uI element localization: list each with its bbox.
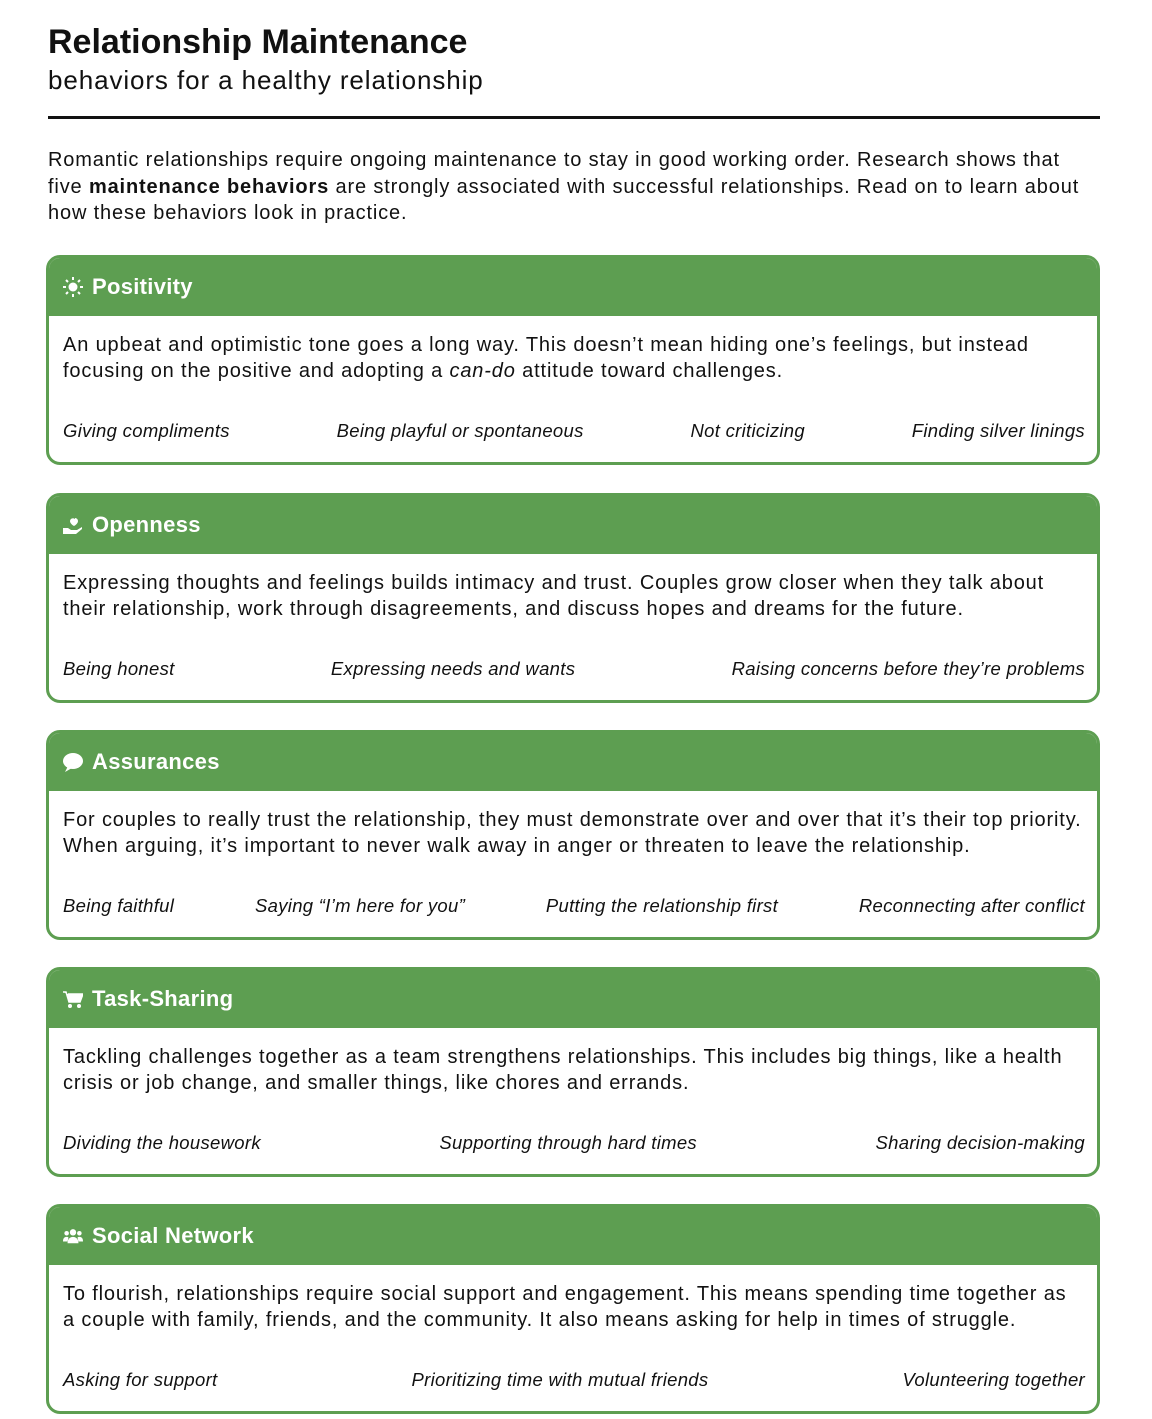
- body text: their relationship, work through disagreements, and discuss hopes and dreams for the future.: [63, 598, 964, 620]
- header: task-sharing: [49, 970, 1097, 1028]
- examples: Prioritizing time with mutual friends: [412, 1369, 708, 1390]
- body text: focusing on the positive and adopting a can-do attitude toward challenges.: [63, 360, 783, 382]
- body text: crisis or job change, and smaller things, like chores and errands.: [63, 1072, 689, 1094]
- examples: Dividing the housework: [63, 1132, 261, 1153]
- examples: Finding silver linings: [912, 420, 1085, 441]
- panel: task-sharing: [46, 967, 1100, 1177]
- examples: Saying “I’m here for you”: [255, 895, 465, 916]
- header: positivity: [49, 258, 1097, 316]
- body text: [63, 334, 1029, 382]
- examples: Raising concerns before they’re problems: [732, 658, 1085, 679]
- title: Relationship Maintenance: [48, 23, 467, 61]
- panel: positivity: [46, 255, 1100, 465]
- examples: Expressing needs and wants: [331, 658, 575, 679]
- header: assurances: Assurances: [92, 749, 220, 774]
- examples: [62, 1369, 1086, 1390]
- examples: Asking for support: [63, 1369, 218, 1390]
- examples: Volunteering together: [902, 1369, 1085, 1390]
- examples: [63, 1132, 1085, 1153]
- body text: [63, 1046, 1062, 1094]
- examples: Putting the relationship first: [546, 895, 778, 916]
- body text: [63, 572, 1044, 620]
- body text: For couples to really trust the relationship, they must demonstrate over and over that it’s their top priority.: [63, 809, 1082, 831]
- header: openness: [49, 496, 1097, 554]
- header: task-sharing: Task-Sharing: [92, 986, 233, 1011]
- examples: Being playful or spontaneous: [337, 420, 584, 441]
- intro text: Romantic relationships require ongoing maintenance to stay in good working order. Research shows that: [48, 149, 1060, 171]
- header: openness: Openness: [92, 512, 201, 537]
- panel: assurances: [46, 730, 1100, 940]
- header: positivity: Positivity: [92, 274, 193, 299]
- header: social network: [49, 1207, 1097, 1265]
- header: social network: Social Network: [92, 1223, 254, 1248]
- examples: Not criticizing: [690, 420, 805, 441]
- examples: Being faithful: [63, 895, 174, 916]
- body text: [63, 1283, 1067, 1331]
- examples: Supporting through hard times: [439, 1132, 697, 1153]
- intro text: [48, 149, 1079, 224]
- header: assurances: [49, 733, 1097, 791]
- panel: social network: [46, 1204, 1100, 1414]
- examples: [63, 658, 1085, 679]
- intro text: how these behaviors look in practice.: [48, 202, 407, 224]
- intro text: five maintenance behaviors are strongly associated with successful relationships. Read on to learn about: [48, 176, 1079, 198]
- body text: An upbeat and optimistic tone goes a long way. This doesn’t mean hiding one’s feelings, but instead: [63, 334, 1029, 356]
- panel: openness: [46, 493, 1100, 703]
- body text: a couple with family, friends, and the community. It also means asking for help in times of struggle.: [63, 1309, 1016, 1331]
- examples: Reconnecting after conflict: [859, 895, 1085, 916]
- body text: Expressing thoughts and feelings builds intimacy and trust. Couples grow closer when they talk about: [63, 572, 1044, 594]
- examples: Sharing decision-making: [876, 1132, 1085, 1153]
- body text: Tackling challenges together as a team strengthens relationships. This includes big things, like a health: [63, 1046, 1062, 1068]
- examples: [63, 420, 1085, 441]
- examples: Giving compliments: [63, 420, 230, 441]
- subtitle: behaviors for a healthy relationship: [48, 65, 484, 95]
- examples: Being honest: [63, 658, 175, 679]
- examples: [63, 895, 1086, 916]
- body text: When arguing, it’s important to never walk away in anger or threaten to leave the relationship.: [63, 835, 971, 857]
- body text: [63, 809, 1082, 857]
- body text: To flourish, relationships require social support and engagement. This means spending time together as: [63, 1283, 1067, 1305]
